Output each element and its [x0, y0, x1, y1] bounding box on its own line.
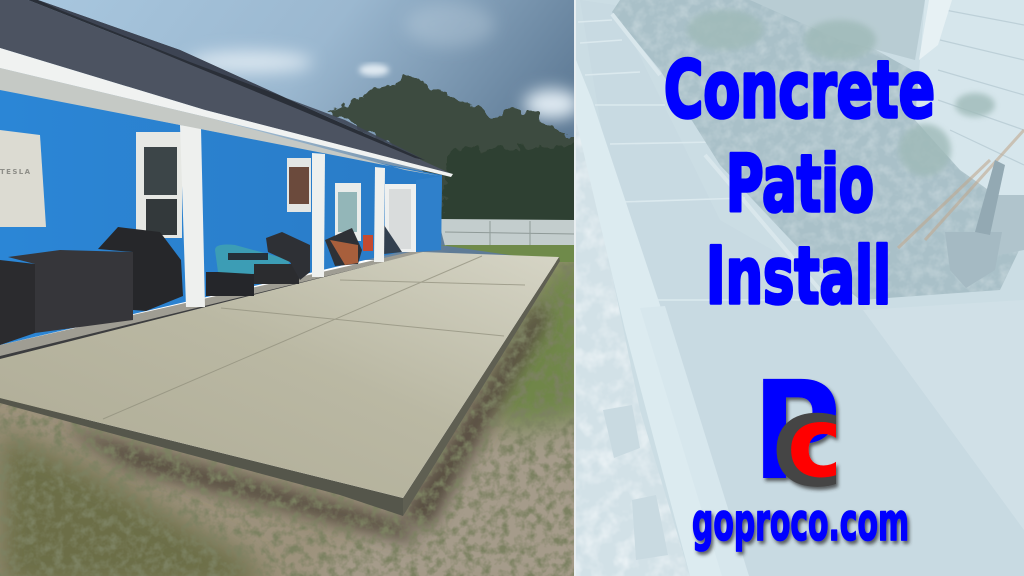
panel: faded walkway background — [576, 0, 1024, 576]
trees — [328, 78, 590, 225]
logo letter c — [776, 412, 841, 492]
grill cover — [98, 227, 183, 311]
planter border — [612, 14, 820, 290]
right slab — [887, 338, 992, 486]
walkway edge — [576, 60, 725, 576]
gravel strip — [576, 100, 696, 576]
plants — [687, 10, 995, 176]
window 1 — [136, 132, 182, 238]
roof — [0, 0, 452, 174]
logo letter c: c — [771, 366, 848, 516]
shovel and bucket — [898, 130, 1024, 288]
title — [664, 46, 935, 322]
tesla battery panel — [0, 130, 46, 227]
planting bed — [610, 0, 1024, 300]
panel: patio photo — [0, 0, 590, 576]
white fence — [438, 219, 575, 246]
base wash — [576, 0, 1024, 576]
patio door — [335, 183, 361, 241]
walkway slab — [580, 0, 1024, 576]
patio porch floor — [0, 252, 425, 360]
house siding — [915, 0, 1024, 215]
concrete slab — [0, 252, 560, 516]
window 2 with shutter — [287, 158, 311, 212]
sky with clouds — [0, 0, 580, 260]
roof fascia and soffit — [0, 48, 453, 177]
logo letter c: c — [787, 387, 844, 499]
white post — [919, 0, 952, 60]
ground — [0, 240, 590, 576]
divider line — [574, 0, 576, 576]
lounge furniture — [206, 225, 402, 296]
white posts — [180, 125, 385, 307]
tesla battery panel: TESLA — [0, 168, 31, 176]
logo: PC mark — [762, 378, 841, 492]
white door — [385, 184, 416, 252]
walkway joints — [578, 20, 800, 300]
storage box 1 — [0, 260, 35, 345]
back lawn — [440, 245, 575, 262]
house wall — [0, 88, 442, 345]
logo letter P: P — [752, 353, 841, 511]
window wall — [750, 0, 925, 60]
title line: Install: Install — [706, 232, 891, 322]
title line: Patio: Patio — [726, 140, 874, 230]
rubble pieces — [603, 405, 668, 560]
right house corner — [416, 176, 442, 252]
storage box 2 — [8, 250, 133, 333]
